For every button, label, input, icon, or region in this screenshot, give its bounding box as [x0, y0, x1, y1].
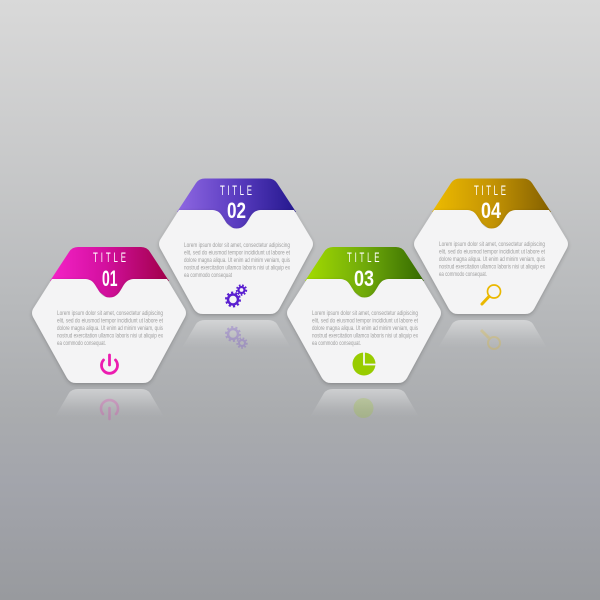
- white hexagon: step 02: [159, 210, 313, 314]
- colored cap: step 04: [432, 178, 551, 231]
- icon: power: [102, 355, 118, 373]
- panel: step 03: [287, 247, 441, 418]
- title: step 03: TITLE: [347, 251, 380, 266]
- text block: step 04: dolore magna aliqua. Ut enim ad minim veniam, quis: [439, 256, 545, 263]
- text block: step 03: Lorem ipsum dolor sit amet, consectetur adipiscing: [312, 310, 418, 317]
- reflection: step 01: [55, 389, 164, 419]
- text block: step 02: ea commodo consequat: [184, 272, 232, 279]
- text block: step 01: ea commodo consequat.: [57, 340, 106, 347]
- panel: step 01: [32, 247, 186, 419]
- text block: step 01: dolore magna aliqua. Ut enim ad minim veniam, quis: [57, 325, 163, 332]
- title: step 02: TITLE: [220, 184, 252, 199]
- icon: gears: [226, 285, 246, 306]
- icon: pie chart: [352, 351, 377, 376]
- text block: step 01: elit, sed do eiusmod tempor incididunt ut labore et: [57, 318, 163, 324]
- reflection: step 02: [182, 320, 291, 348]
- white hexagon: step 03: [287, 279, 441, 383]
- text block: step 04: ea commodo consequat.: [439, 271, 487, 278]
- text block: step 04: [439, 241, 545, 278]
- number: step 04: 04: [481, 198, 502, 223]
- number: step 03: 03: [354, 266, 374, 291]
- white hexagon: step 04: [414, 210, 568, 314]
- text block: step 03: elit, sed do eiusmod tempor incididunt ut labore et: [312, 318, 418, 324]
- number: step 02: 02: [227, 198, 246, 223]
- text block: step 01: nostrud exercitation ullamco laboris nisi ut aliquip ex: [57, 332, 163, 340]
- text block: step 03: dolore magna aliqua. Ut enim ad minim veniam, quis: [312, 325, 418, 332]
- text block: step 04: elit, sed do eiusmod tempor incididunt ut labore et: [439, 248, 545, 256]
- text block: step 03: ea commodo consequat.: [312, 340, 361, 347]
- icon: magnifier: [482, 285, 500, 304]
- panel: step 02: [159, 178, 313, 348]
- reflection: step 03: [310, 389, 419, 418]
- colored cap: step 02: [177, 178, 296, 231]
- title: step 04: TITLE: [474, 184, 506, 199]
- white hexagon: step 01: [32, 279, 186, 383]
- text block: step 04: nostrud exercitation ullamco laboris nisi ut aliquip ex: [439, 264, 545, 270]
- panel: step 04: [414, 178, 568, 349]
- title: step 01: TITLE: [93, 251, 126, 266]
- text block: step 03: nostrud exercitation ullamco laboris nisi ut aliquip ex: [312, 332, 418, 340]
- number: step 01: 01: [102, 266, 118, 291]
- text block: step 02: elit, sed do eiusmod tempor incididunt ut labore et: [184, 250, 290, 256]
- text block: step 02: dolore magna aliqua. Ut enim ad minim veniam, quis: [184, 257, 290, 264]
- text block: step 01: [57, 310, 163, 347]
- text block: step 02: [184, 242, 290, 279]
- colored cap: step 01: [50, 247, 169, 300]
- text block: step 03: [312, 310, 418, 347]
- text block: step 04: Lorem ipsum dolor sit amet, consectetur adipiscing: [439, 241, 545, 248]
- text block: step 01: Lorem ipsum dolor sit amet, consectetur adipiscing: [57, 310, 163, 317]
- text block: step 02: nostrud exercitation ullamco laboris nisi ut aliquip ex: [184, 264, 290, 272]
- colored cap: step 03: [305, 247, 424, 300]
- reflection: step 04: [438, 320, 547, 349]
- text block: step 02: Lorem ipsum dolor sit amet, consectetur adipiscing: [184, 242, 290, 249]
